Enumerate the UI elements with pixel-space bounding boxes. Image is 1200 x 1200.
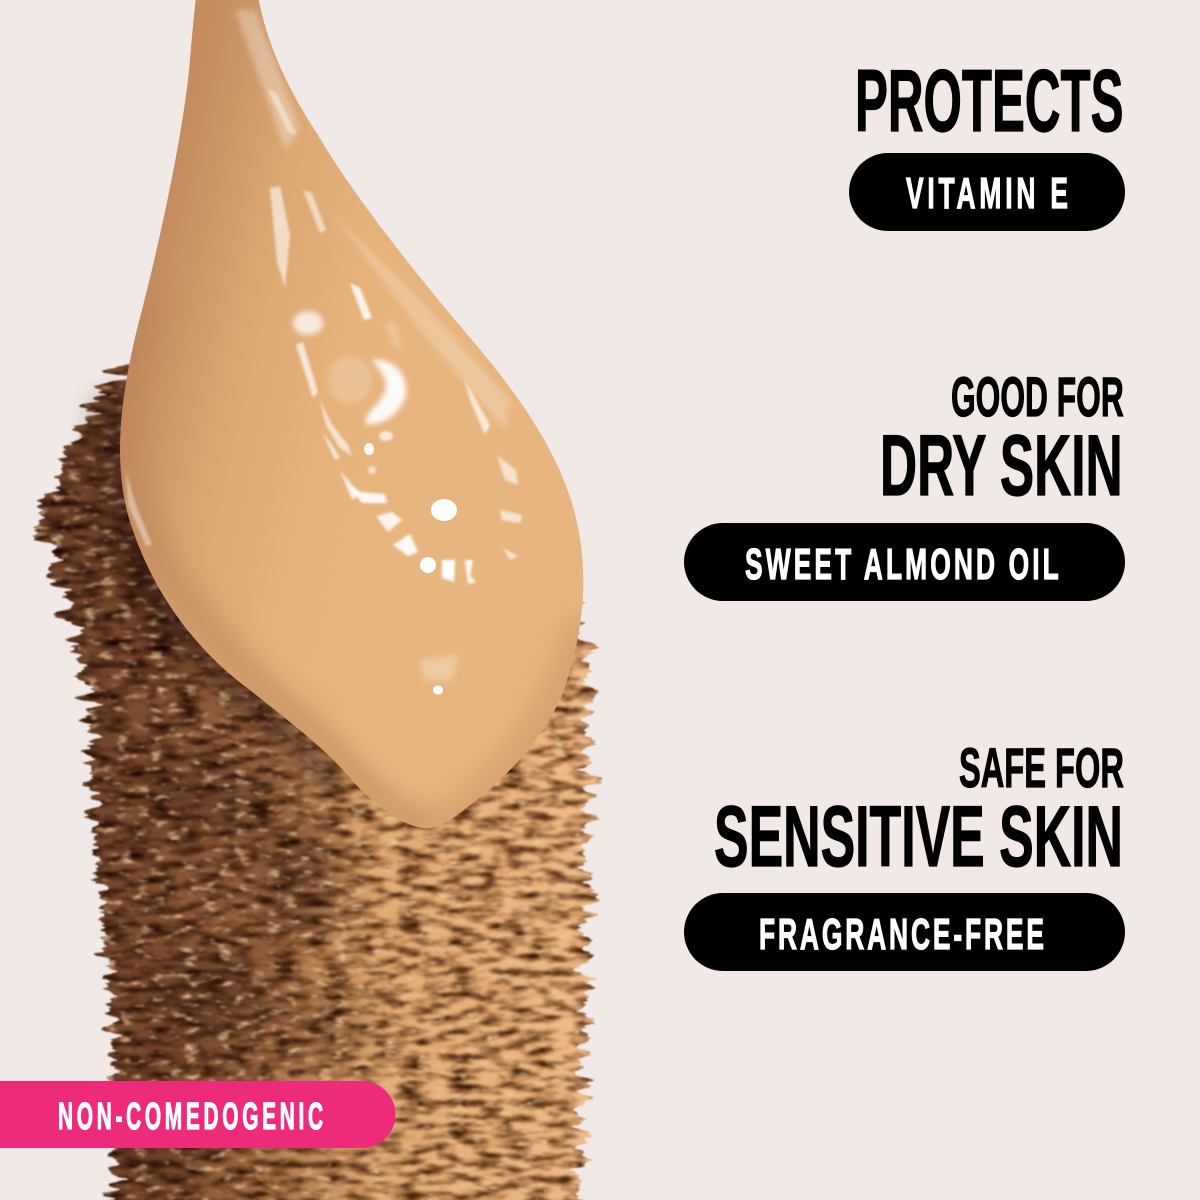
shaded lower edge of drop [128,300,585,830]
pill: fragrance-free: FRAGRANCE-FREE [759,909,1044,959]
contact shadow under drop [111,400,340,790]
heading: protects: PROTECTS [855,53,1124,151]
pill: fragrance-free [684,893,1125,971]
heading: safe for: SAFE FOR [959,738,1124,800]
claim: safe for sensitive skin [684,738,1125,971]
pill: vitamin e [849,153,1125,231]
pill: vitamin e: VITAMIN E [906,168,1068,218]
pill: sweet almond oil: SWEET ALMOND OIL [745,539,1059,589]
pill: sweet almond oil [684,523,1125,601]
claim: good for dry skin [684,367,1125,601]
badge: non-comedogenic [0,1081,396,1148]
heading: good for: GOOD FOR [951,367,1124,429]
claim: protects [849,53,1125,231]
brush bristles [43,362,590,1200]
badge: non-comedogenic: NON-COMEDOGENIC [58,1096,323,1138]
heading: dry skin: DRY SKIN [880,417,1123,513]
heading: sensitive skin: SENSITIVE SKIN [714,788,1123,884]
foundation drop [120,0,585,830]
highlights on drop [126,10,522,694]
